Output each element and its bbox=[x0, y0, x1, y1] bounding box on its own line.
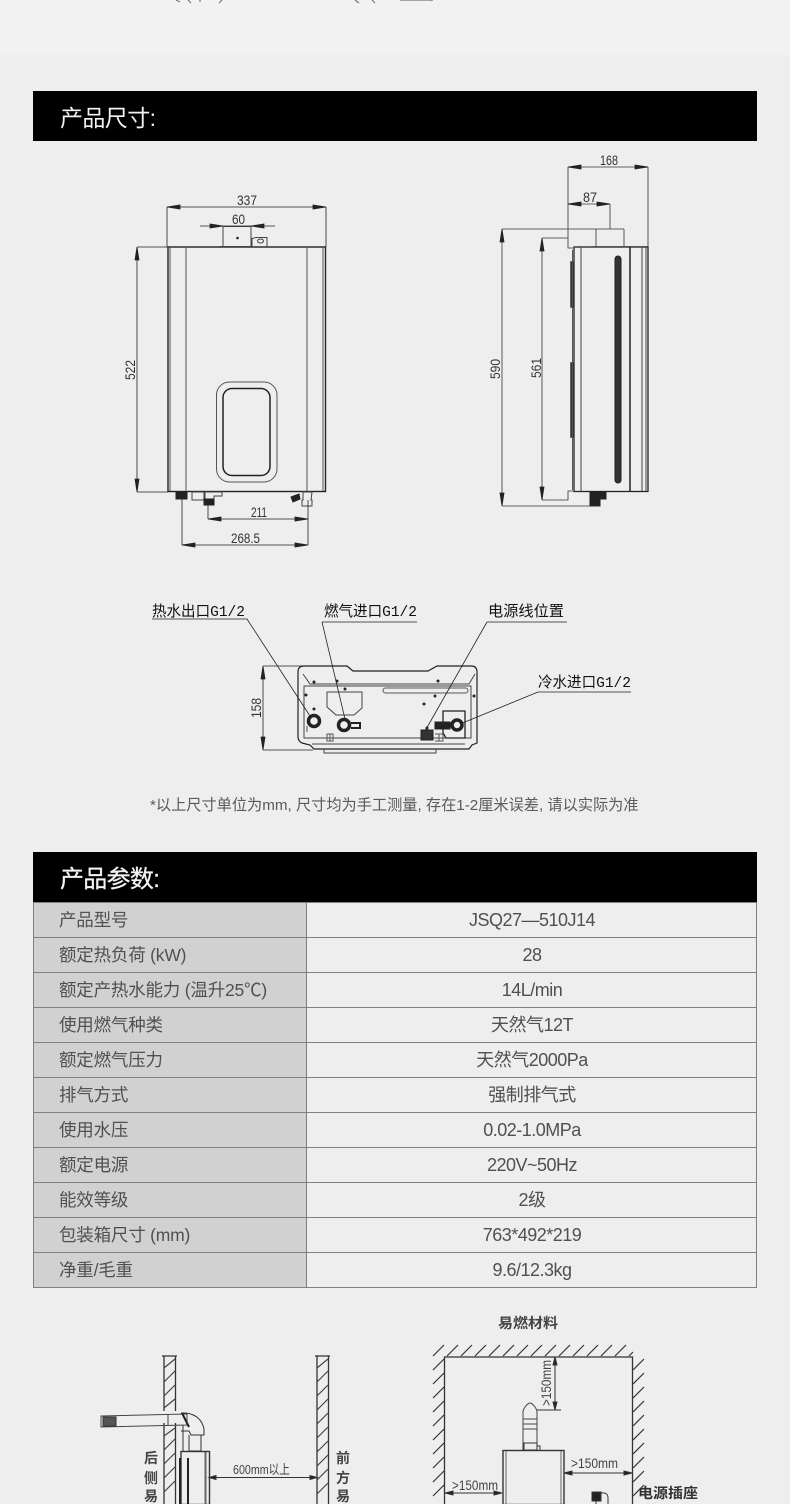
diagram: clearance to flammable materials: >150mm bbox=[571, 1455, 618, 1471]
diagram: bottom view with connection labels: 冷水进口G1/2 bbox=[538, 674, 631, 692]
table: product parameters: 763*492*219 bbox=[483, 1225, 581, 1245]
table: product parameters: 9.6/12.3kg bbox=[492, 1260, 572, 1280]
table: product parameters: 天然气12T bbox=[491, 1015, 573, 1035]
textured top band bbox=[0, 0, 790, 55]
diagram: clearance to flammable materials: 易燃材料 bbox=[498, 1315, 558, 1331]
front dimensions bbox=[135, 205, 326, 547]
table: product parameters: 排气方式 bbox=[59, 1085, 128, 1105]
diagram: front view with dimensions: 590 bbox=[487, 359, 503, 379]
table: product parameters: 0.02-1.0MPa bbox=[483, 1120, 581, 1140]
diagram: front view with dimensions: 211 bbox=[251, 504, 267, 520]
table: product parameters: 220V~50Hz bbox=[487, 1155, 577, 1175]
diagram: side installation clearance: 方 bbox=[336, 1470, 350, 1486]
diagram: front view with dimensions: 268.5 bbox=[231, 530, 260, 546]
table: product parameters bbox=[33, 902, 757, 1288]
table: product parameters: 包装箱尺寸 (mm) bbox=[59, 1225, 190, 1245]
diagram: side installation clearance: 前 bbox=[336, 1450, 350, 1466]
table: product parameters: 产品型号 bbox=[59, 910, 128, 930]
table: product parameters: JSQ27—510J14 bbox=[469, 910, 595, 930]
table: product parameters: 14L/min bbox=[502, 980, 562, 1000]
note: measurement disclaimer: *以上尺寸单位为mm, 尺寸均为手工测量, 存在1-2厘米误差, 请以实际为准 bbox=[150, 797, 639, 814]
diagram: front view with dimensions: 337 bbox=[237, 192, 257, 208]
diagram: front view with dimensions: 60 bbox=[232, 211, 245, 227]
table: product parameters: 额定产热水能力 (温升25℃) bbox=[59, 980, 267, 1000]
heading: product dimensions bbox=[33, 91, 757, 141]
heading: product parameters: 产品参数: bbox=[60, 866, 159, 893]
heading: product dimensions: 产品尺寸: bbox=[60, 105, 155, 131]
diagram: clearance to flammable materials: 电源插座 bbox=[638, 1485, 698, 1501]
diagram: front view with dimensions: 522 bbox=[122, 360, 138, 380]
table: product parameters: 额定电源 bbox=[59, 1155, 128, 1175]
diagram: bottom view with connection labels: 电源线位置 bbox=[488, 603, 564, 620]
diagram: bottom view with connection labels: 燃气进口G1/2 bbox=[324, 602, 417, 621]
diagram: side installation clearance: 易 bbox=[336, 1488, 350, 1504]
table: product parameters: 2级 bbox=[518, 1190, 546, 1210]
heading: product parameters bbox=[33, 852, 757, 902]
table: product parameters: 天然气2000Pa bbox=[476, 1050, 588, 1070]
diagram: front view with dimensions: 168 bbox=[600, 152, 618, 168]
table: product parameters: 净重/毛重 bbox=[59, 1260, 133, 1280]
table: product parameters: 使用水压 bbox=[59, 1120, 128, 1140]
diagram: front view with dimensions: 158 bbox=[248, 698, 264, 718]
diagram: side installation clearance: 易 bbox=[144, 1488, 158, 1504]
front body bbox=[168, 226, 326, 506]
diagram: clearance to flammable materials: >150mm bbox=[538, 1360, 554, 1406]
diagram: bottom view with connection labels: 热水出口G1/2 bbox=[152, 603, 245, 621]
diagram: side installation clearance: 侧 bbox=[144, 1470, 158, 1486]
table: product parameters: 额定热负荷 (kW) bbox=[59, 945, 186, 965]
diagram: front view with dimensions: 87 bbox=[583, 189, 597, 205]
table: product parameters: 28 bbox=[522, 945, 542, 965]
diagram: side installation clearance: 后 bbox=[144, 1450, 158, 1466]
table: product parameters: 能效等级 bbox=[59, 1190, 128, 1210]
table: product parameters: 使用燃气种类 bbox=[59, 1015, 163, 1035]
diagram: front view with dimensions: 561 bbox=[528, 358, 544, 378]
table: product parameters: 额定燃气压力 bbox=[59, 1050, 163, 1070]
table: product parameters: 强制排气式 bbox=[488, 1085, 576, 1105]
diagram: side installation clearance: 600mm以上 bbox=[233, 1462, 290, 1477]
diagram: clearance to flammable materials: >150mm bbox=[452, 1477, 498, 1493]
